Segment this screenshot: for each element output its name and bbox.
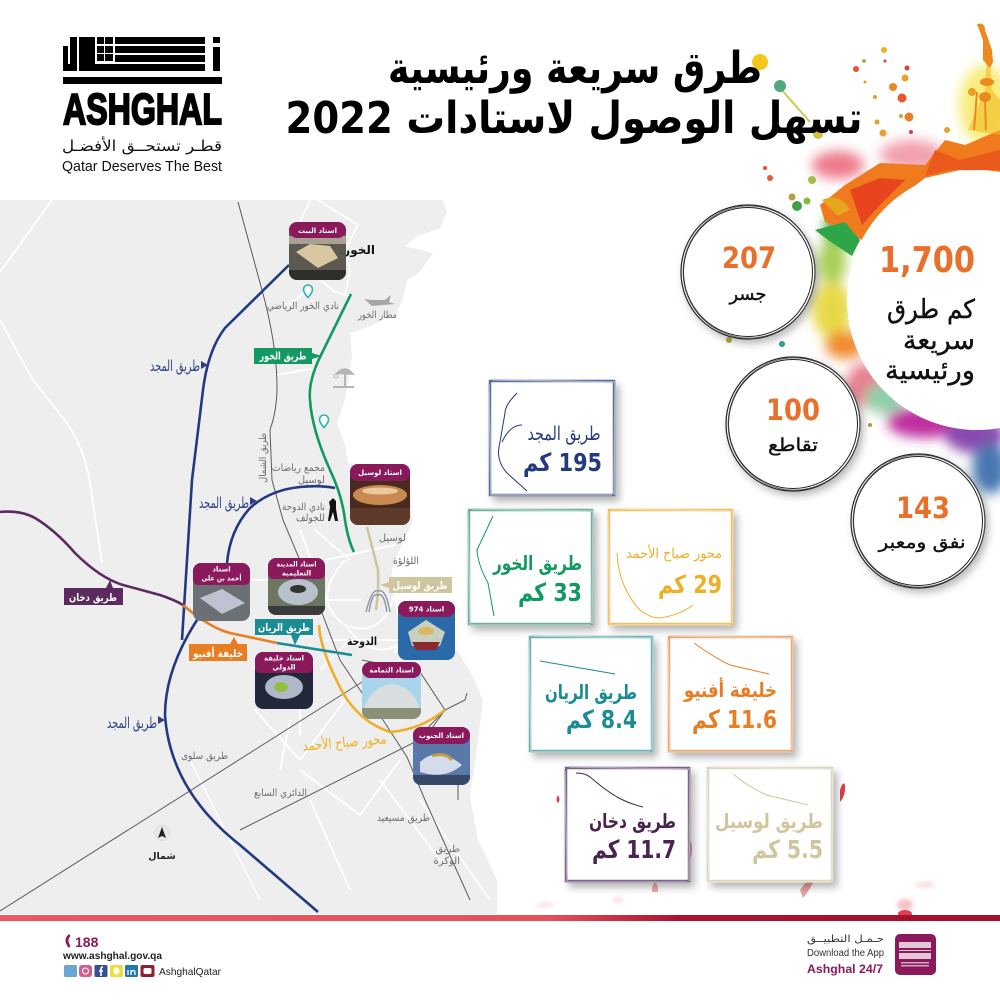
box: Lusail 5.5 km: [707, 767, 833, 882]
icon: Lusail arch: [366, 591, 390, 612]
stat: 1,700 km: [847, 170, 1000, 430]
stat: 207 bridges: [681, 205, 815, 339]
map place labels: الدوحة: [347, 635, 377, 648]
tag: Dukhan road: طريق دخان: [69, 592, 117, 604]
title: [285, 43, 862, 144]
box: Dukhan 11.7 km: [565, 767, 690, 882]
dark highway lines: [0, 202, 470, 911]
box: Khalifa Avenue 11.6 km: 11.6 كم: [692, 705, 777, 734]
stadium card: Al Bayt: [289, 222, 346, 280]
box: Lusail 5.5 km: 5.5 كم: [752, 835, 823, 864]
stadium card: 974: [398, 601, 455, 660]
box: Al Rayyan 8.4 km: طريق الريان: [545, 680, 637, 704]
icon: app logo: [895, 934, 936, 975]
stadium card: Lusail: [350, 464, 410, 525]
stat: 1,700 km: ورئيسية: [885, 356, 975, 386]
script label: Sabah Al Ahmad: محور صباح الأحمد: [302, 729, 387, 755]
tag: Khalifa Avenue: [189, 637, 247, 661]
map place labels: اللؤلؤة: [393, 556, 419, 567]
logo: [62, 37, 222, 175]
footer contact: 188: [75, 934, 99, 950]
box: Lusail 5.5 km: طريق لوسيل: [715, 809, 823, 833]
icon: social media row: [64, 965, 154, 977]
map place labels: طريق الشمال: [258, 433, 269, 483]
box: Sabah Al Ahmad 29 km: [608, 509, 733, 625]
stadium card: Ahmad bin Ali: [193, 563, 250, 621]
stadium card: Ahmad bin Ali: استاد: [212, 566, 231, 574]
road: Al Khor: [310, 294, 354, 552]
stat: 100 interchanges: تقاطع: [768, 435, 818, 456]
footer contact: www.ashghal.gov.qa: [62, 951, 162, 962]
map place labels: الخور: [342, 243, 375, 258]
road: Khalifa Avenue: [183, 605, 277, 643]
stat: 1,700 km: سريعة: [903, 326, 975, 356]
road: Al Majd branch: [227, 486, 335, 563]
stadium card: Khalifa International: [255, 652, 313, 709]
stadium card: Education City: [268, 558, 325, 615]
stadium card: Al Janoub: [413, 727, 470, 785]
road: Al Majd south: [165, 620, 318, 912]
tag: Al Rayyan road: [255, 619, 313, 645]
map: [0, 200, 497, 914]
icon: beach umbrella: [333, 368, 355, 388]
icon: golfer: [328, 498, 338, 521]
box: Khalifa Avenue 11.6 km: خليفة أفنيو: [683, 676, 777, 702]
stat: 143 tunnels: 143: [896, 491, 950, 525]
script label: Al Majd 1: طريق المجد: [150, 357, 200, 375]
map place labels: نادي الخور الرياضي: [267, 301, 339, 312]
title: طرق سريعة ورئيسية: [388, 43, 762, 94]
logo Arabic slogan: قطـر تستحــق الأفضـل: [62, 136, 222, 155]
map land: [0, 200, 497, 914]
stadium card: Khalifa International: الدولي: [272, 664, 296, 672]
stat: 143 tunnels: نفق ومعبر: [877, 533, 966, 553]
stat: 207 bridges: جسر: [729, 284, 766, 305]
stadium card: Al Thumama: [362, 662, 421, 719]
box: Sabah Al Ahmad 29 km: 29 كم: [658, 570, 722, 599]
footer app download: حـمـل التطبيــق: [807, 934, 884, 945]
box: Sabah Al Ahmad 29 km: محور صباح الأحمد: [626, 544, 722, 562]
logo bar: [63, 77, 222, 84]
logo kufic mark: [63, 37, 220, 71]
stat: 207 bridges: 207: [722, 241, 776, 275]
footer contact: AshghalQatar: [159, 966, 221, 978]
stat: 143 tunnels: [851, 454, 985, 588]
tag: Lusail road: طريق لوسيل: [392, 580, 448, 592]
stadium card: Al Janoub: استاد الجنوب: [419, 732, 464, 740]
road: Sabah Al Ahmad: [319, 625, 445, 732]
box: Al Majd 195 km: 195 كم: [523, 448, 602, 477]
road: Lusail: [367, 527, 378, 610]
map place labels: طريق سلوى: [181, 751, 228, 762]
footer bar: [0, 915, 1000, 921]
map place labels: لوسيل: [379, 533, 406, 544]
script label: Al Majd 2: طريق المجد: [199, 494, 249, 512]
box: Dukhan 11.7 km: 11.7 كم: [592, 835, 676, 864]
icon: north arrow: شمال: [148, 851, 176, 862]
box: Dukhan 11.7 km: طريق دخان: [589, 809, 676, 833]
map place labels: [181, 243, 460, 867]
stadium card: Al Bayt: استاد البيت: [298, 227, 337, 235]
tag: Al Khor road: طريق الخور: [259, 350, 307, 362]
icon: north arrow: [148, 826, 176, 862]
stadium card: 974: استاد 974: [409, 606, 444, 614]
road: Dukhan: [0, 512, 183, 605]
stat: 100 interchanges: 100: [766, 393, 820, 427]
stadium card: Education City: استاد المدينة: [276, 560, 316, 568]
road: Al Majd north: [182, 265, 289, 640]
map place labels: الدائري السابع: [254, 788, 307, 799]
logo English slogan: Qatar Deserves The Best: [62, 159, 222, 175]
footer app download: Download the App: [807, 948, 884, 959]
map place labels: طريق: [435, 844, 460, 855]
tag: Dukhan road: [64, 580, 123, 605]
box: Al Majd 195 km: [489, 380, 615, 495]
white road network: [0, 200, 490, 900]
script label: Al Majd 3: طريق المجد: [107, 714, 157, 732]
icon: plane: [364, 295, 395, 306]
stat: 1,700 km: 1,700: [879, 240, 975, 281]
map place labels: طريق مسيعيد: [377, 813, 430, 824]
title: تسهل الوصول لاستادات 2022: [285, 93, 862, 144]
tag: Al Rayyan road: طريق الريان: [258, 622, 310, 634]
footer app download: [807, 934, 936, 976]
footer contact: [62, 934, 221, 978]
box: Al Rayyan 8.4 km: 8.4 كم: [566, 705, 637, 734]
map place labels: الوكرة: [433, 856, 460, 867]
map place labels: للجولف: [296, 513, 325, 524]
map place labels: لوسيل: [298, 475, 325, 486]
stadium card: Education City: التعليمية: [282, 570, 311, 578]
paint splash: [534, 24, 1000, 918]
icon: location pin coast: [320, 415, 328, 428]
logo wordmark: ASHGHAL: [63, 85, 222, 134]
box: Al Khor 33 km: 33 كم: [518, 578, 582, 607]
footer app download: Ashghal 24/7: [807, 962, 883, 976]
box: Al Khor 33 km: طريق الخور: [492, 551, 582, 575]
road: Al Rayyan: [277, 643, 352, 655]
box: Al Majd 195 km: طريق المجد: [528, 423, 600, 445]
tag: Lusail road: [380, 577, 452, 593]
box: Al Khor 33 km: [468, 509, 593, 625]
stadium card: Al Thumama: استاد الثمامة: [369, 666, 414, 674]
tag: Khalifa Avenue: خليفة أفنيو: [192, 646, 243, 660]
icon: phone: [66, 934, 70, 948]
pale splatter near footer: [534, 690, 935, 918]
map place labels: نادي الدوحة: [282, 502, 325, 513]
stadium card: Lusail: استاد لوسيل: [358, 469, 402, 477]
box: Khalifa Avenue 11.6 km: [668, 636, 793, 752]
stadium card: Ahmad bin Ali: أحمد بن علي: [202, 574, 242, 582]
stadium card: Khalifa International: استاد خليفة: [264, 654, 304, 662]
map place labels: مطار الخور: [357, 310, 397, 321]
map place labels: مجمع رياضات: [272, 463, 325, 474]
box: Al Rayyan 8.4 km: [529, 636, 653, 752]
stat: 100 interchanges: [726, 357, 860, 491]
stat: 1,700 km: كم طرق: [887, 295, 976, 325]
tag: Al Khor road: [254, 348, 322, 364]
icon: location pin Al Khor club: [304, 285, 312, 298]
